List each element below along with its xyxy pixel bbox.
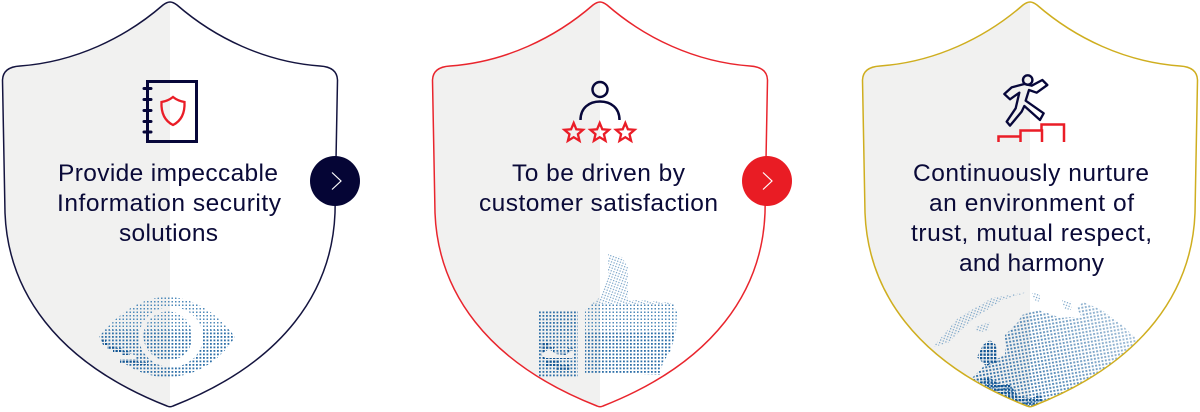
- heading: customer satisfaction: To be driven by: [512, 160, 686, 187]
- arrow button navy: [310, 156, 360, 206]
- heading: information security: solutions: [119, 220, 218, 247]
- shield outline navy: [2, 2, 338, 407]
- heading: trust and harmony: [911, 160, 1152, 277]
- shield outline gold: [862, 2, 1198, 407]
- shield background left half: [432, 2, 600, 407]
- heading: customer satisfaction: [479, 160, 718, 217]
- shield background left half: [2, 2, 170, 407]
- heading: customer satisfaction: customer satisfaction: [479, 190, 718, 217]
- dotted thumbs-up illustration: [539, 254, 680, 377]
- shield background left half: [862, 2, 1030, 407]
- icon: runner on steps: [998, 75, 1064, 142]
- dotted eye illustration: [99, 298, 235, 376]
- heading: trust and harmony: and harmony: [959, 250, 1105, 277]
- heading: trust and harmony: trust, mutual respect,: [911, 220, 1152, 247]
- shield outline red: [432, 2, 768, 407]
- heading: information security: Information security: [57, 190, 282, 217]
- panel: customer satisfaction shield: [432, 2, 792, 407]
- heading: trust and harmony: Continuously nurture: [913, 160, 1149, 187]
- heading: information security: [57, 160, 282, 247]
- panel: information security shield: [2, 2, 360, 407]
- heading: information security: Provide impeccable: [58, 160, 278, 187]
- heading: trust and harmony: an environment of: [929, 190, 1134, 217]
- dotted globe illustration: [934, 292, 1138, 406]
- icon: notebook with shield: [144, 82, 196, 142]
- icon: person with three stars: [564, 82, 635, 141]
- panel: trust and harmony shield: [862, 2, 1198, 412]
- arrow button red: [742, 156, 792, 206]
